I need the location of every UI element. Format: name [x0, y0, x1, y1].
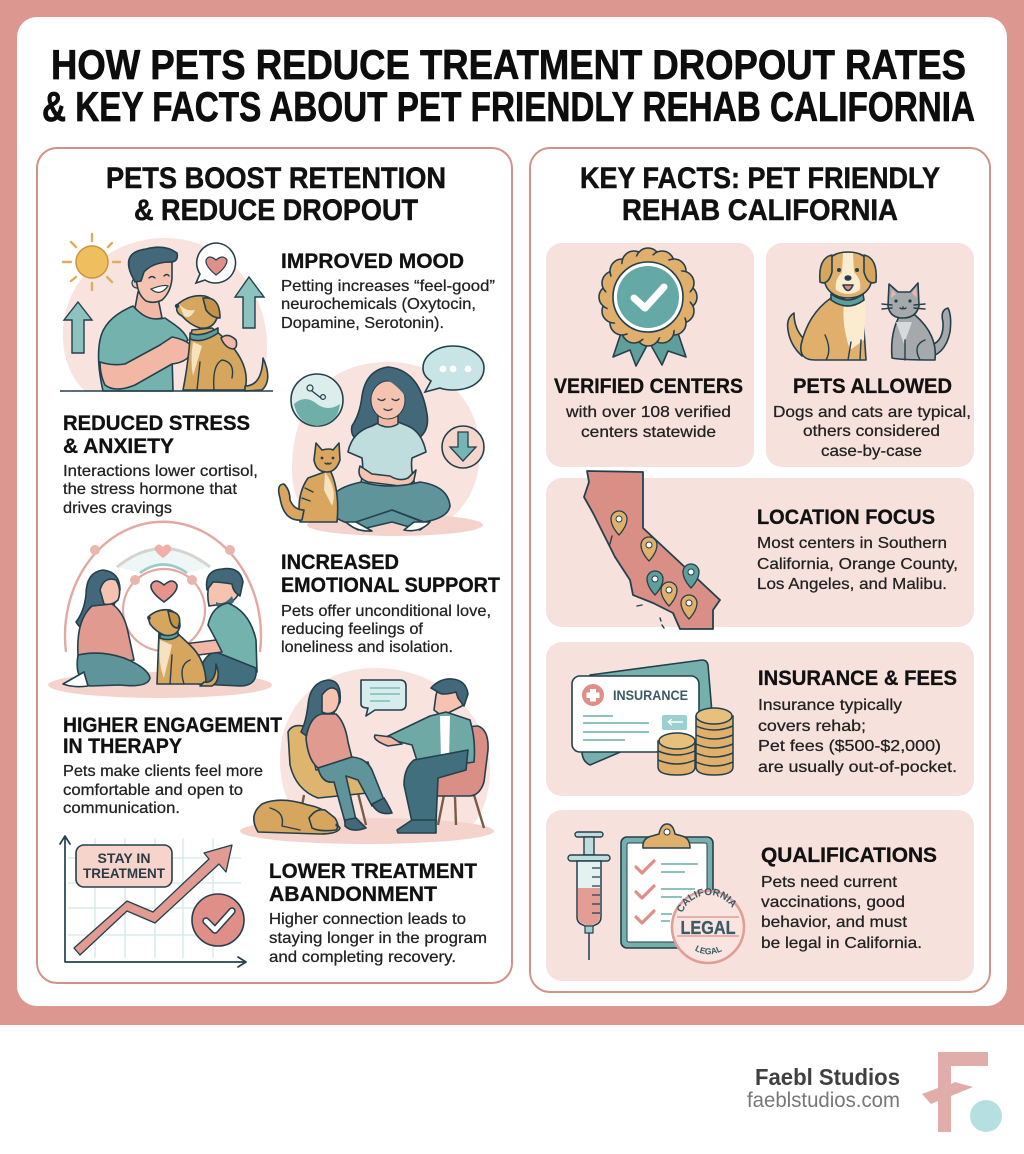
left panel heading: PETS BOOST RETENTION [106, 162, 446, 195]
right panel heading: REHAB CALIFORNIA [622, 194, 898, 227]
icon: dog and cat [788, 252, 951, 360]
illustration: therapy session with dog [240, 668, 494, 844]
text: lower treatment abandonment [269, 860, 487, 966]
text: qualifications: vaccinations, good [761, 894, 905, 911]
text: increased emotional support: EMOTIONAL SUPPORT [281, 574, 500, 597]
text: lower treatment abandonment: and completing recovery. [269, 949, 456, 966]
icon: california map with pins [584, 471, 720, 629]
icon: clipboard with legal stamp: LEGAL [695, 945, 722, 954]
text: higher engagement in therapy: IN THERAPY [63, 735, 182, 758]
footer logo [922, 1052, 1002, 1132]
text: improved mood: neurochemicals (Oxytocin, [281, 296, 476, 313]
text: higher engagement in therapy: comfortable and open to [63, 782, 243, 799]
text: increased emotional support: loneliness and isolation. [281, 639, 453, 656]
text: reduced stress and anxiety: & ANXIETY [63, 435, 174, 458]
text: qualifications [761, 844, 937, 952]
text: improved mood [281, 250, 495, 332]
title [42, 41, 975, 130]
text: insurance and fees [758, 667, 957, 776]
icon: syringe [568, 832, 610, 960]
text: lower treatment abandonment: staying longer in the program [269, 930, 487, 947]
text: qualifications: behavior, and must [761, 914, 908, 931]
text: qualifications: QUALIFICATIONS [761, 844, 937, 867]
card: qualifications [546, 810, 974, 981]
text: reduced stress and anxiety [63, 412, 258, 517]
left panel heading [106, 162, 446, 227]
text: qualifications: Pets need current [761, 874, 898, 891]
text: location focus: Most centers in Southern [757, 535, 947, 552]
text: lower treatment abandonment: LOWER TREATMENT [269, 860, 477, 883]
text: insurance and fees: INSURANCE & FEES [758, 667, 957, 690]
text: reduced stress and anxiety: drives cravings [63, 500, 172, 517]
icon: insurance card and coins [572, 660, 733, 775]
text: improved mood: Petting increases “feel-good” [281, 278, 495, 295]
chart: stay in treatment rising line [60, 836, 246, 967]
text: higher engagement in therapy: Pets make clients feel more [63, 763, 263, 780]
icon: clipboard with legal stamp: LEGAL [680, 918, 736, 938]
text: increased emotional support: Pets offer unconditional love, [281, 603, 491, 620]
text: pets allowed: PETS ALLOWED [793, 375, 952, 398]
card: insurance and fees [546, 642, 974, 796]
text: lower treatment abandonment: Higher connection leads to [269, 911, 466, 928]
text: pets allowed: case-by-case [821, 443, 922, 460]
footer brand text [747, 1064, 900, 1112]
text: insurance and fees: are usually out-of-pocket. [758, 759, 957, 776]
panel: pets boost retention [37, 148, 512, 983]
text: reduced stress and anxiety: REDUCED STRESS [63, 412, 250, 435]
text: higher engagement in therapy [63, 714, 282, 817]
text: increased emotional support: INCREASED [281, 551, 399, 574]
footer brand text: faeblstudios.com [747, 1089, 900, 1112]
icon: insurance card and coins: INSURANCE [613, 688, 688, 703]
text: location focus [757, 506, 958, 593]
text: higher engagement in therapy: communication. [63, 800, 180, 817]
left panel heading: & REDUCE DROPOUT [134, 194, 418, 227]
illustration: couple with dog and love arcs [48, 522, 272, 698]
icon: clipboard with legal stamp [620, 823, 746, 964]
panel: key facts [529, 147, 991, 993]
text: higher engagement in therapy: HIGHER ENGAGEMENT [63, 714, 282, 737]
illustration: woman meditating with cat [279, 346, 484, 536]
text: improved mood: IMPROVED MOOD [281, 250, 464, 273]
text: reduced stress and anxiety: the stress hormone that [63, 481, 238, 498]
text: insurance and fees: covers rehab; [758, 718, 866, 735]
text: qualifications: be legal in California. [761, 935, 922, 952]
text: pets allowed: others considered [803, 423, 940, 440]
card: pets allowed [766, 243, 974, 467]
text: reduced stress and anxiety: Interactions lower cortisol, [63, 463, 258, 480]
text: pets allowed: Dogs and cats are typical, [773, 404, 971, 421]
chart: stay in treatment rising line: STAY IN [98, 850, 150, 866]
text: verified centers: centers statewide [581, 424, 716, 441]
text: improved mood: Dopamine, Serotonin). [281, 315, 444, 332]
text: location focus: LOCATION FOCUS [757, 506, 935, 529]
card: verified centers [546, 243, 754, 467]
text: verified centers [554, 375, 743, 441]
illustration: man petting dog [60, 234, 273, 391]
text: increased emotional support: reducing feelings of [281, 621, 424, 638]
text: insurance and fees: Insurance typically [758, 697, 902, 714]
right panel heading: KEY FACTS: PET FRIENDLY [580, 162, 940, 195]
icon: clipboard with legal stamp: CALIFORNIA [677, 888, 736, 912]
text: location focus: California, Orange County, [757, 556, 958, 573]
text: pets allowed [773, 375, 971, 460]
text: verified centers: with over 108 verified [565, 404, 731, 421]
text: insurance and fees: Pet fees ($500-$2,000) [758, 738, 941, 755]
text: verified centers: VERIFIED CENTERS [554, 375, 743, 398]
icon: verified badge [599, 248, 697, 366]
card: location focus [546, 471, 974, 629]
text: location focus: Los Angeles, and Malibu. [757, 576, 947, 593]
text: increased emotional support [281, 551, 500, 656]
footer brand text: Faebl Studios [755, 1064, 900, 1090]
text: lower treatment abandonment: ABANDONMENT [269, 883, 437, 906]
chart: stay in treatment rising line: TREATMENT [83, 865, 165, 881]
right panel heading [580, 162, 940, 227]
